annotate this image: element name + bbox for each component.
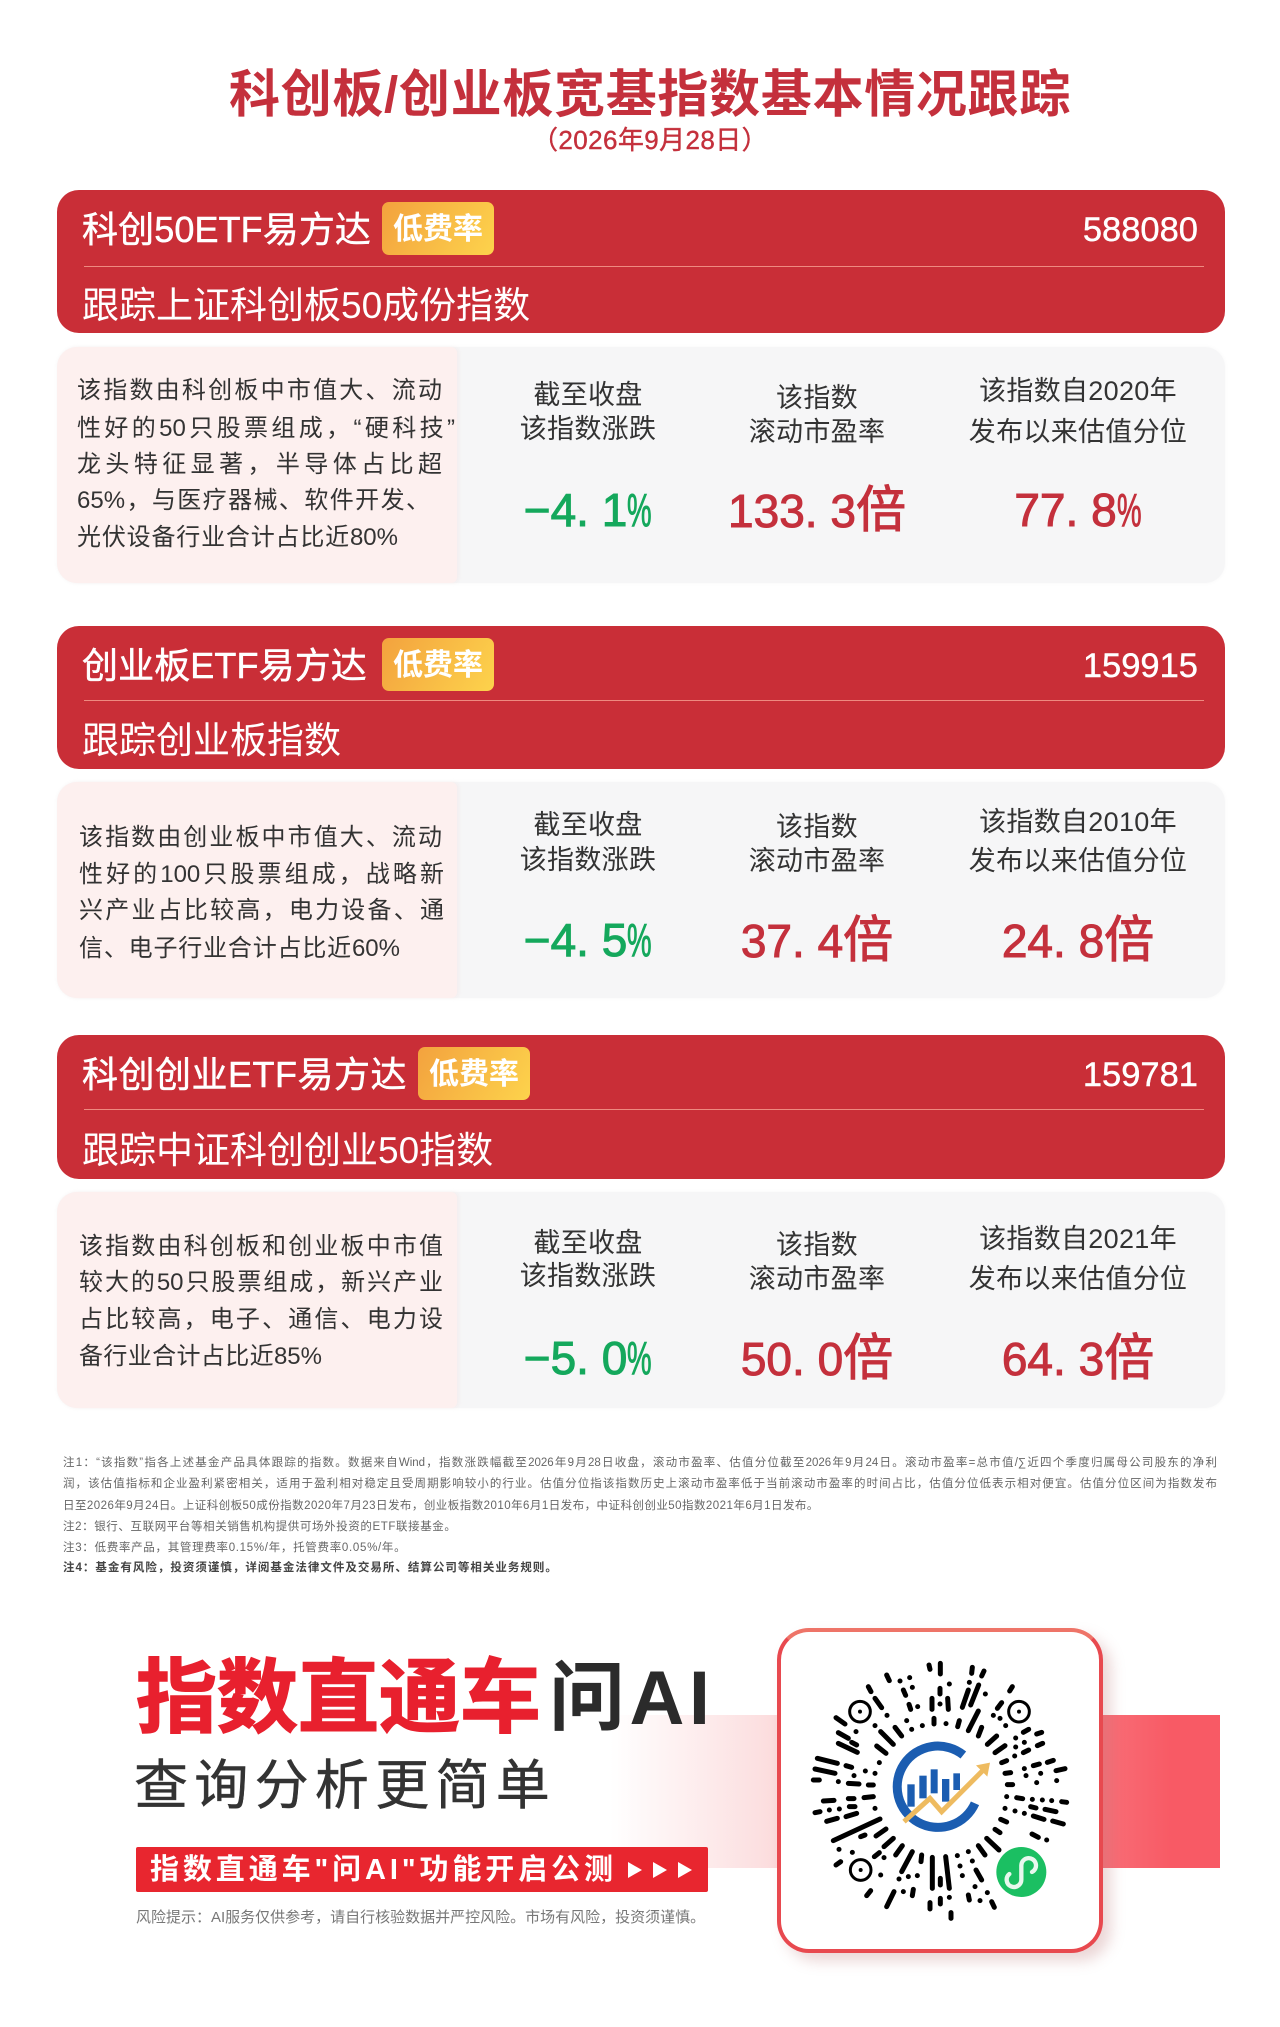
fund code: 159915 [1083, 647, 1198, 685]
fund code: 159781 [1083, 1056, 1198, 1094]
card 1: 科创50ETF [57, 190, 1225, 583]
header bar 2 [57, 626, 1225, 769]
data panel 3 [57, 1192, 1225, 1408]
note 4: 注4：基金有风险，投资须谨慎，详阅基金法律文件及交易所、结算公司等相关业务规则。 [63, 1562, 558, 1574]
metric label: percentile: 该指数自2010年 [979, 807, 1177, 837]
description line: 信、电子行业合计占比近60% [79, 935, 400, 962]
description line: 兴产业占比较高，电力设备、通 [79, 897, 444, 924]
value: change: % [627, 914, 652, 966]
risk notice: 风险提示：AI服务仅供参考，请自行核验数据并严控风险。市场有风险，投资须谨慎。 [136, 1909, 705, 1926]
value: percentile: 24. 8倍 [1002, 912, 1154, 968]
card 2: 创业板ETF [57, 626, 1225, 998]
note 3: 注3：低费率产品，其管理费率0.15%/年，托管费率0.05%/年。 [63, 1542, 406, 1554]
fund name: 科创50ETF易方达 [82, 209, 371, 250]
metric label: percentile line 2: 发布以来估值分位 [969, 417, 1187, 447]
note 1 line 2: 润，该估值指标和企业盈利紧密相关，适用于盈利相对稳定且受周期影响较小的行业。估值分位指该指数历史上滚动市盈率低于当前滚动市盈率的时间占比，估值分位低表示相对便宜。估值分位区间为指数发布 [63, 1478, 1217, 1490]
metric label: PE: 该指数 [776, 383, 858, 413]
badge: low fee [382, 638, 494, 691]
metric label: change: 截至收盘 [533, 380, 643, 410]
value: PE: 50. 0倍 [741, 1330, 893, 1386]
promo headline [136, 1654, 714, 1744]
value: PE: 133. 3倍 [728, 482, 906, 538]
badge: low fee [418, 1047, 530, 1100]
metric label: PE line 2: 滚动市盈率 [749, 846, 885, 876]
QR code modules [813, 1663, 1067, 1918]
metric label: percentile: 该指数自2020年 [979, 376, 1177, 406]
strip arrows [628, 1862, 692, 1878]
badge: low fee [382, 202, 494, 255]
data panel 2 [57, 782, 1225, 998]
title: 科创板/创业板宽基指数基本情况跟踪 [229, 66, 1071, 123]
value: percentile: 77. 8 [1014, 484, 1117, 536]
description line: 性好的50只股票组成，“硬科技” [77, 415, 455, 442]
description line: 光伏设备行业合计占比近80% [77, 524, 398, 551]
description line: 性好的100只股票组成，战略新 [79, 861, 444, 888]
QR code card [777, 1628, 1103, 1953]
value: change: −5. 0 [524, 1332, 627, 1384]
headline red text: 指数直通车 [136, 1654, 541, 1744]
tracked index: 跟踪上证科创板50成份指数 [82, 285, 530, 326]
description line: 较大的50只股票组成，新兴产业 [79, 1269, 443, 1296]
badge: low fee: 低费率 [393, 213, 483, 246]
promo red strip [136, 1847, 708, 1892]
metric label: change: 截至收盘 [533, 810, 643, 840]
logo: blue C with bars [897, 1746, 975, 1827]
description panel [57, 782, 457, 998]
metric label: percentile: 该指数自2021年 [979, 1224, 1177, 1254]
header bar 1 [57, 190, 1225, 333]
fund name: 创业板ETF易方达 [82, 645, 367, 686]
description panel [57, 1192, 457, 1408]
header bar 3 [57, 1035, 1225, 1179]
metric label: PE: 该指数 [776, 1230, 858, 1260]
metric label: percentile line 2: 发布以来估值分位 [969, 1264, 1187, 1294]
metric label: PE line 2: 滚动市盈率 [749, 1264, 885, 1294]
note 1 line 3: 日至2026年9月24日。上证科创板50成份指数2020年7月23日发布，创业板指数2010年6月1日发布，中证科创创业50指数2021年6月1日发布。 [63, 1500, 819, 1512]
pink band behind QR card [610, 1715, 1220, 1868]
metric label: percentile line 2: 发布以来估值分位 [969, 846, 1187, 876]
value: percentile: % [1117, 484, 1141, 536]
value: PE: 37. 4倍 [741, 912, 893, 968]
value: change: % [627, 484, 652, 536]
metric label: change line 2: 该指数涨跌 [520, 1261, 656, 1291]
tracked index: 跟踪创业板指数 [82, 720, 341, 761]
description panel [57, 347, 457, 583]
metric label: PE: 该指数 [776, 812, 858, 842]
QR finder patterns [850, 1701, 1029, 1880]
description line: 占比较高，电子、通信、电力设 [79, 1306, 443, 1333]
tracked index: 跟踪中证科创创业50指数 [82, 1130, 493, 1171]
note 2: 注2：银行、互联网平台等相关销售机构提供可场外投资的ETF联接基金。 [63, 1521, 457, 1533]
metric label: PE line 2: 滚动市盈率 [749, 417, 885, 447]
metric label: change line 2: 该指数涨跌 [520, 845, 656, 875]
value: percentile: 64. 3倍 [1002, 1330, 1154, 1386]
description line: 龙头特征显著，半导体占比超 [77, 451, 442, 478]
metric label: change: 截至收盘 [533, 1228, 643, 1258]
footnotes [63, 1456, 1217, 1574]
headline dark text: 问AI [549, 1656, 714, 1741]
logo: rising arrow [904, 1763, 990, 1822]
fund name: 科创创业ETF易方达 [82, 1054, 407, 1095]
note 1 line 1: 注1：“该指数”指各上述基金产品具体跟踪的指数。数据来自Wind，指数涨跌幅截至2026年9月28日收盘，滚动市盈率、估值分位截至2026年9月24日。滚动市盈率=总市值/∑近四个季度归属母公司股东的净利 [63, 1457, 1217, 1469]
data panel 1 [57, 347, 1225, 583]
description line: 该指数由科创板和创业板中市值 [79, 1233, 443, 1260]
promo subheading: 查询分析更简单 [134, 1756, 556, 1816]
value: change: −4. 1 [524, 484, 627, 536]
description line: 65%，与医疗器械、软件开发、 [77, 487, 430, 514]
metric label: change line 2: 该指数涨跌 [520, 414, 656, 444]
subtitle: date: （2026年9月28日） [532, 125, 768, 155]
description line: 该指数由科创板中市值大、流动 [77, 377, 442, 404]
badge: low fee: 低费率 [429, 1058, 519, 1091]
fund code: 588080 [1083, 211, 1198, 249]
description line: 备行业合计占比近85% [79, 1343, 322, 1370]
card 3: 科创创业ETF [57, 1035, 1225, 1408]
description line: 该指数由创业板中市值大、流动 [79, 824, 442, 851]
strip text: 指数直通车"问AI"功能开启公测 [150, 1854, 617, 1886]
QR code graphic [810, 1660, 1070, 1921]
value: change: % [627, 1332, 652, 1384]
icon: mini program badge [996, 1847, 1046, 1897]
value: change: −4. 5 [524, 914, 627, 966]
badge: low fee: 低费率 [393, 649, 483, 682]
